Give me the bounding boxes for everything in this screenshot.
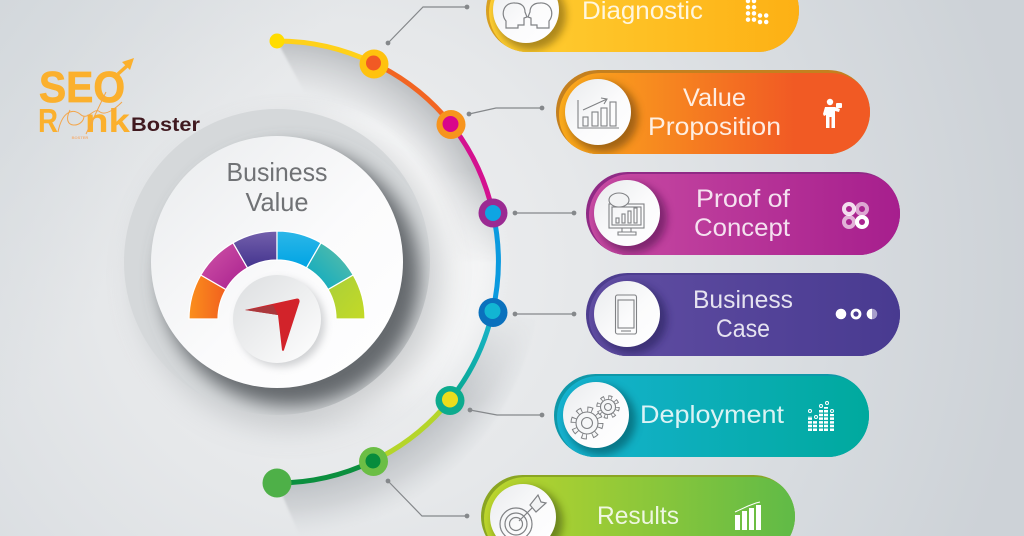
logo: SEO Rank Boster: nk	[85, 102, 131, 139]
pill: Value Proposition	[556, 70, 873, 157]
label: Value Proposition	[648, 84, 781, 141]
pill: Business Case	[586, 273, 903, 358]
label: Deployment: Deployment	[640, 401, 784, 429]
logo: SEO Rank Boster	[38, 58, 200, 140]
icon: four rings	[844, 204, 867, 227]
icon: three dots	[836, 309, 877, 319]
icon: gears	[563, 382, 629, 448]
icon: two heads	[493, 0, 559, 43]
label: Business Case: Case	[716, 315, 770, 343]
label: Value Proposition: Proposition	[648, 113, 781, 141]
dial title: Business	[226, 157, 328, 187]
label: Proof of Concept: Proof of	[696, 185, 790, 213]
dial title: Value	[246, 187, 308, 217]
pill: Proof of Concept	[586, 172, 903, 257]
icon: monitor with speech bubble	[594, 180, 660, 246]
logo: SEO Rank Boster: Boster	[131, 114, 200, 136]
central dial ring	[124, 109, 439, 426]
icon: bar chart with trend	[735, 502, 761, 530]
label: Business Case: Business	[693, 286, 793, 314]
gauge needle	[245, 298, 300, 351]
icon: smartphone	[594, 281, 660, 347]
label: Proof of Concept	[694, 185, 790, 242]
dial title	[226, 157, 328, 217]
timeline arc	[277, 41, 498, 483]
pill: Deployment	[554, 374, 872, 459]
gauge segments	[189, 231, 365, 319]
gauge hub	[233, 275, 325, 367]
pill: Diagnostic	[486, 0, 802, 54]
pill: Results	[481, 475, 798, 536]
icon: target and arrow	[490, 484, 556, 536]
label: Proof of Concept: Concept	[694, 214, 790, 242]
icon: dot grid	[748, 1, 772, 23]
logo: SEO Rank Boster: BOSTER	[72, 135, 88, 140]
timeline nodes	[262, 34, 508, 498]
label: Results: Results	[597, 502, 679, 530]
icon: growth chart	[565, 79, 631, 145]
logo: SEO Rank Boster: R	[38, 102, 58, 139]
arc shadow: upper	[277, 41, 498, 262]
arc shadow: lower	[282, 327, 514, 523]
label: Value Proposition: Value	[683, 84, 746, 112]
connector lines	[386, 5, 576, 518]
central white dial	[151, 136, 403, 388]
label: Business Case	[693, 286, 793, 343]
icon: presenter	[823, 99, 842, 128]
icon: dotted equalizer	[808, 402, 834, 431]
logo: SEO Rank Boster: SEO	[39, 63, 125, 112]
